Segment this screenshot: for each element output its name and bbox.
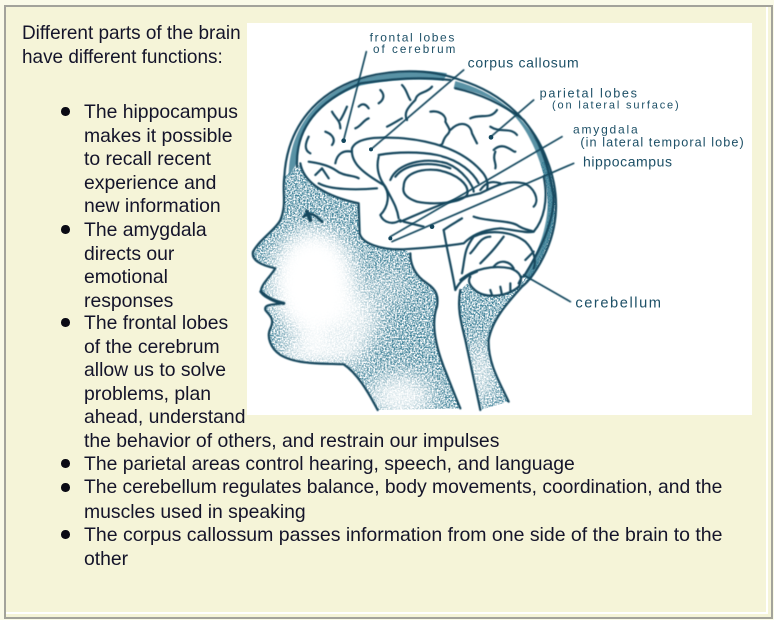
item: cerebellum: The cerebellum regulates balance, body movements, coordination, and the <box>84 477 722 498</box>
shading: skull band <box>289 71 554 280</box>
item: frontal lobes: ahead, understand <box>84 406 245 428</box>
heading: intro text: have different functions: <box>22 46 223 68</box>
item: corpus callosum: The corpus callossum passes information from one side of the brain to the <box>84 524 722 546</box>
bullet list: brain functions <box>61 70 722 570</box>
item: hippocampus: experience and <box>84 172 216 194</box>
label: amygdala: (in lateral temporal lobe) <box>580 136 744 150</box>
item: amygdala: directs our <box>84 242 174 264</box>
label: parietal lobes: (on lateral surface) <box>552 100 679 112</box>
item: cerebellum <box>61 477 722 522</box>
label: hippocampus: hippocampus <box>583 154 672 170</box>
item: hippocampus: new information <box>84 195 221 217</box>
heading: intro text <box>22 22 241 68</box>
item: hippocampus <box>61 101 238 217</box>
outline: eye <box>304 214 322 222</box>
outline: cerebellum <box>460 267 521 296</box>
drawing: head and brain outlines <box>253 71 556 410</box>
outline: lower brain <box>400 182 536 232</box>
leader end dots <box>341 135 493 240</box>
label: frontal lobes of cerebrum <box>370 30 455 56</box>
item: cerebellum: muscles used in speaking <box>84 500 306 522</box>
item: amygdala: The amygdala <box>84 219 207 241</box>
item: hippocampus: makes it possible <box>84 124 232 146</box>
label: amygdala: amygdala <box>573 122 638 136</box>
label: parietal lobes: parietal lobes <box>540 87 637 101</box>
label: corpus callosum: corpus callosum <box>468 54 579 70</box>
item: corpus callosum <box>61 524 722 570</box>
item: frontal lobes: problems, plan <box>84 382 211 404</box>
item: parietal areas: The parietal areas control hearing, speech, and language <box>84 453 575 475</box>
outline: skull and brain <box>284 71 556 402</box>
item: hippocampus: to recall recent <box>84 148 211 170</box>
item: amygdala: responses <box>84 290 173 312</box>
label: cerebellum: cerebellum <box>575 295 661 311</box>
illustration: labelled brain diagram <box>247 23 752 415</box>
item: frontal lobes: the behavior of others, and restrain our impulses <box>84 430 499 452</box>
heading: intro text: Different parts of the brain <box>22 22 241 44</box>
item: amygdala: emotional <box>84 266 168 288</box>
label: frontal lobes of cerebrum: frontal lobes <box>370 30 454 44</box>
item: corpus callosum: other <box>84 548 128 570</box>
outline: cerebral folds <box>306 85 517 189</box>
leader lines <box>344 52 574 302</box>
outline: spinal cord <box>444 230 480 410</box>
label: parietal lobes <box>540 87 679 112</box>
item: frontal lobes <box>61 312 499 452</box>
item: frontal lobes: allow us to solve <box>84 359 226 381</box>
label: amygdala <box>573 122 744 150</box>
outline: corpus callosum and ventricle <box>352 138 488 223</box>
item: amygdala <box>61 219 207 312</box>
item: hippocampus: The hippocampus <box>84 101 238 123</box>
outline: face profile <box>253 177 378 410</box>
shading: stippled face and neck <box>253 162 556 410</box>
outline: lips <box>261 292 284 303</box>
item: frontal lobes: of the cerebrum <box>84 336 220 358</box>
label: frontal lobes of cerebrum: of cerebrum <box>373 43 455 56</box>
item: frontal lobes: The frontal lobes <box>84 312 228 334</box>
